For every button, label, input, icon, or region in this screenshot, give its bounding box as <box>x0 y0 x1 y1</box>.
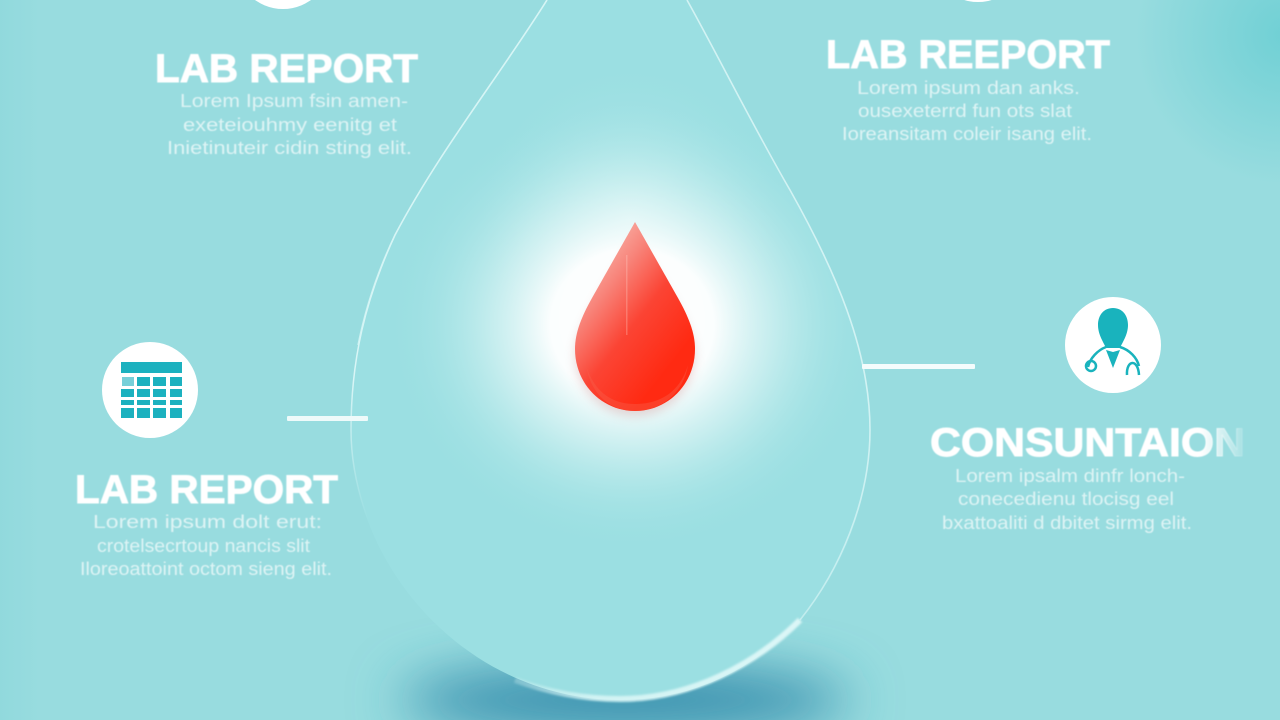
body <box>80 512 332 579</box>
icon: doctor <box>1065 297 1161 393</box>
heading: LAB REPORT <box>155 47 418 91</box>
body: Lorem ipsum dan anks. <box>857 78 1080 98</box>
icon: top-left circle <box>235 0 331 9</box>
large translucent drop <box>340 0 880 720</box>
body: Iloreoattoint octom sieng elit. <box>80 559 332 579</box>
heading: CONSUNTAION <box>930 421 1245 465</box>
body: conecedienu tlocisg eel <box>958 489 1174 509</box>
body: crotelsecrtoup nancis slit <box>97 536 310 556</box>
red blood drop <box>575 222 695 416</box>
body <box>167 91 412 158</box>
icon: top-right circle <box>930 0 1026 2</box>
body <box>942 466 1192 533</box>
ground shadow <box>400 668 850 720</box>
body: Ioreansitam coleir isang elit. <box>842 124 1092 144</box>
body: Lorem ipsum dolt erut: <box>93 512 322 532</box>
body: Lorem ipsalm dinfr lonch- <box>955 466 1185 486</box>
text block: left lab report <box>75 468 338 579</box>
text block: consultation <box>930 421 1245 533</box>
body: bxattoaliti d dbitet sirmg elit. <box>942 513 1192 533</box>
connector: left <box>287 416 368 421</box>
body: exeteiouhmy eenitg et <box>183 115 397 135</box>
body: Lorem Ipsum fsin amen- <box>180 91 408 111</box>
body <box>842 78 1092 144</box>
connector: right <box>862 364 975 369</box>
icon: calendar <box>102 342 198 438</box>
body: Inietinuteir cidin sting elit. <box>167 138 412 158</box>
text block: top-left lab report <box>155 47 418 158</box>
body: ousexeterrd fun ots slat <box>858 101 1072 121</box>
heading: LAB REPORT <box>75 468 338 512</box>
heading: LAB REEPORT <box>826 33 1110 77</box>
text block: top-right lab report <box>826 33 1110 144</box>
